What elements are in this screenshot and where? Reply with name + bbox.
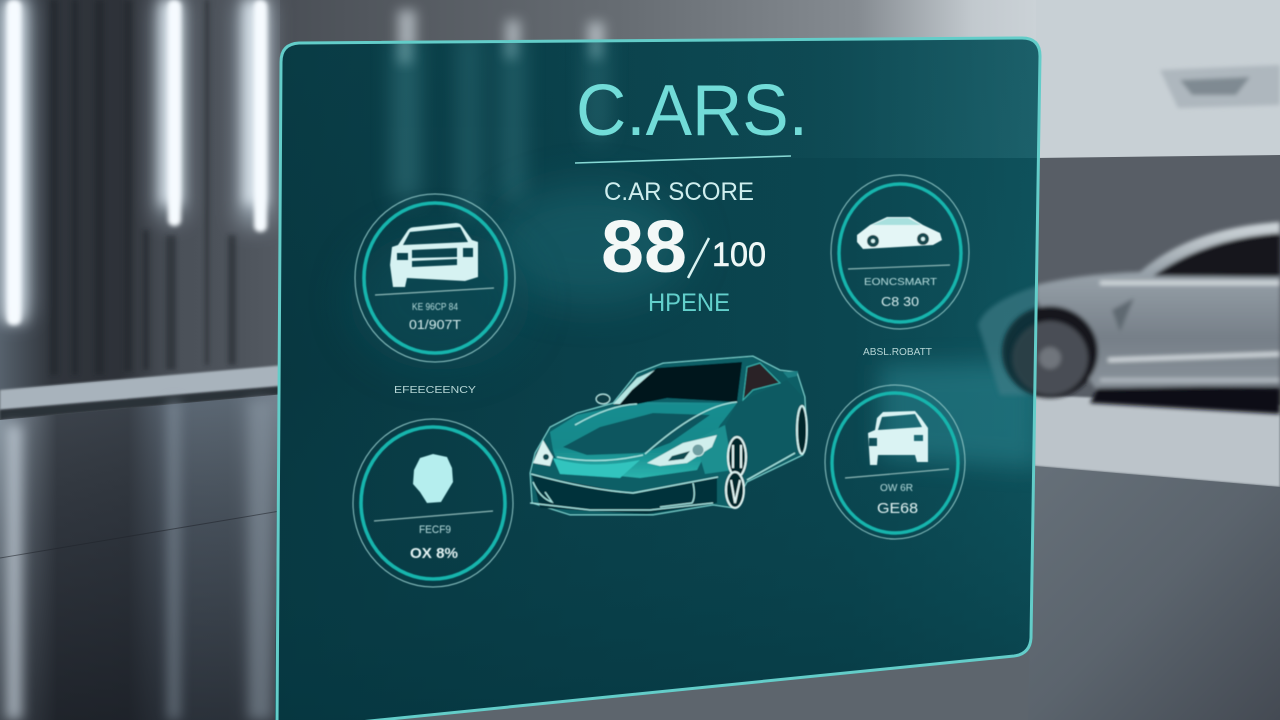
panel: tinted layers and reflections	[275, 40, 1038, 710]
gauge value: GE68	[877, 500, 918, 517]
background: ceiling light tubes	[2, 0, 604, 325]
hero car: rear wheel	[797, 406, 807, 454]
gauge value: 01/907T	[409, 317, 461, 332]
hero car: door side	[718, 380, 803, 478]
glass panel	[270, 30, 1098, 720]
score label: C.AR SCORE	[604, 178, 754, 206]
background: rear corridor strip	[280, 0, 1050, 60]
background: right kerb	[1034, 395, 1280, 487]
gauge label: FECF9	[419, 524, 451, 536]
hero car: trim lines	[530, 402, 795, 510]
gauge rings	[353, 419, 513, 587]
hero car: side window	[743, 363, 780, 400]
hero car: headlight right	[647, 435, 717, 466]
score block	[601, 178, 766, 317]
panel: cyan border	[277, 38, 1040, 720]
score rating: HPENE	[648, 289, 730, 317]
hero car: hood shading	[563, 413, 710, 455]
gauge divider	[848, 265, 950, 269]
hero car: fender highlight	[695, 425, 733, 474]
gauge value: C8 30	[881, 295, 919, 309]
background: floor ledge	[0, 365, 285, 420]
gauge label: EONCSMART	[864, 276, 938, 288]
caption: left: EFEECEENCY	[394, 384, 476, 396]
gauge rings	[825, 385, 965, 539]
hero car: spoiler	[783, 371, 798, 378]
gauge rings	[355, 194, 515, 362]
gauge label: OW 6R	[880, 482, 913, 494]
hero car: bonnet highlight	[553, 458, 640, 478]
icon: car front	[390, 223, 478, 287]
background: right floor	[1028, 466, 1280, 720]
gauge rings	[831, 175, 969, 329]
hero car: mirror	[596, 394, 610, 404]
caption: right: ABSL.ROBATT	[863, 347, 932, 358]
background: floor below panel	[280, 640, 1040, 720]
hero car: hood and fender	[550, 402, 737, 478]
background: right upper wall	[1036, 0, 1280, 158]
gauge divider	[845, 469, 949, 478]
icon: car rear	[868, 411, 928, 465]
hero car: front wheel	[726, 437, 746, 508]
score slash	[688, 238, 709, 278]
background: reflective floor	[0, 394, 285, 720]
hero car	[530, 356, 807, 515]
icon: side car	[857, 217, 942, 249]
background: right dark wall	[1036, 155, 1280, 400]
hero car: body	[530, 356, 807, 515]
gauge: bottom left	[353, 419, 513, 587]
background: blurred silver car	[1002, 222, 1280, 414]
hero car: lower bumper	[532, 475, 717, 514]
background: wall vent	[1160, 65, 1280, 108]
gauge divider	[375, 288, 494, 295]
gauge: top left	[355, 194, 515, 362]
score maximum: 100	[712, 236, 766, 274]
gauge label: KE 96CP 84	[412, 302, 458, 313]
title divider	[575, 156, 791, 163]
hero car: windshield reflection	[613, 370, 655, 404]
background: left ribbed wall	[0, 0, 285, 390]
gauge: top right	[831, 175, 969, 329]
icon: bulb shape	[413, 454, 453, 503]
gauge value: OX 8%	[410, 545, 458, 562]
gauge: bottom right	[825, 385, 965, 539]
gauge divider	[374, 511, 493, 521]
title: C.ARS.	[576, 71, 808, 151]
panel: glass fill	[275, 38, 1040, 720]
hero car: windshield	[615, 362, 742, 405]
score value: 88	[601, 205, 687, 288]
hero car: headlight left	[533, 440, 553, 466]
